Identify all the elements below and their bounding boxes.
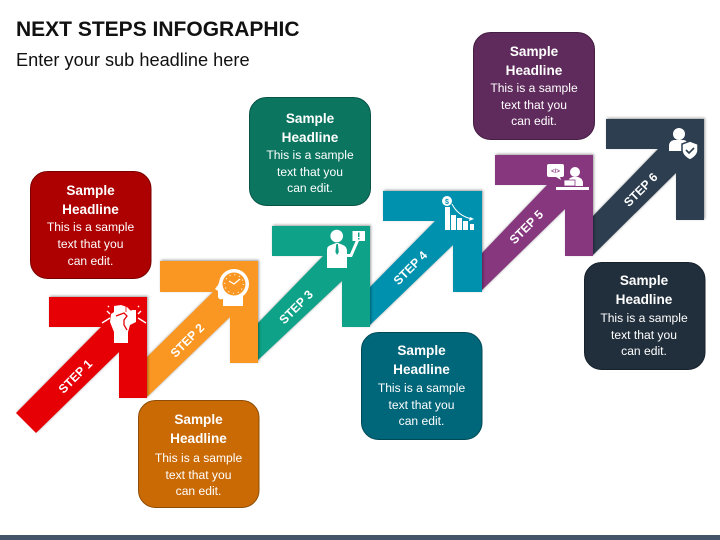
callout: step 4: text that you xyxy=(389,398,454,412)
callout: step 4: This is a sample xyxy=(378,381,465,395)
callout: step 1 xyxy=(30,172,151,278)
footer bar xyxy=(0,535,720,540)
callout: step 4 xyxy=(362,332,482,440)
callout: step 3: Headline xyxy=(282,130,339,145)
callout: step 1: text that you xyxy=(58,237,123,251)
callout: step 6 xyxy=(584,262,705,370)
callout: step 2: Sample xyxy=(174,412,223,427)
callout: step 5: can edit. xyxy=(511,114,557,128)
callout: step 3: can edit. xyxy=(287,181,333,195)
callout: step 5: Headline xyxy=(506,63,563,78)
arrow: step 2 xyxy=(147,261,258,397)
arrow: step 6: STEP 6 xyxy=(621,170,661,209)
callout: step 2 xyxy=(138,400,259,508)
callout: step 3: text that you xyxy=(277,165,343,179)
callout: step 5: Sample xyxy=(510,44,559,59)
icon: person with shield xyxy=(669,128,698,160)
icon: raised fist xyxy=(102,305,146,343)
callout: step 5: text that you xyxy=(501,98,567,112)
callout: step 6: This is a sample xyxy=(600,311,688,325)
callout: step 6: text that you xyxy=(611,328,677,342)
callout: step 6: Sample xyxy=(620,273,669,288)
callout: step 6: can edit. xyxy=(621,344,667,358)
arrow: step 3 xyxy=(258,226,370,360)
arrow: step 6 xyxy=(593,119,704,255)
arrow: step 5: STEP 5 xyxy=(507,207,546,247)
icon: developer at desk: </> xyxy=(551,169,560,175)
icon: businessman holding sign xyxy=(327,230,365,268)
icon: falling bar chart: $ xyxy=(445,199,449,206)
callout: step 2: This is a sample xyxy=(155,451,242,465)
callout: step 4: Headline xyxy=(393,362,450,377)
callout: step 5: This is a sample xyxy=(490,81,578,95)
callout: step 3 xyxy=(250,98,370,206)
callout: step 1: This is a sample xyxy=(47,220,134,234)
arrow: step 2: STEP 2 xyxy=(168,321,207,360)
callout: step 6: Headline xyxy=(616,292,673,307)
callout: step 1: Sample xyxy=(66,183,115,198)
callout: step 3: Sample xyxy=(286,111,335,126)
callout: step 1: Headline xyxy=(62,202,119,217)
arrow: step 5 xyxy=(482,155,593,290)
callout: step 4: can edit. xyxy=(399,414,444,428)
callout: step 2: Headline xyxy=(170,431,227,446)
arrow: step 3: STEP 3 xyxy=(276,287,316,327)
subtitle: Enter your sub headline here xyxy=(16,50,250,70)
arrow: step 4: STEP 4 xyxy=(391,248,430,288)
arrow: step 1: STEP 1 xyxy=(56,357,95,396)
icon: head with clock xyxy=(215,269,249,306)
title: NEXT STEPS INFOGRAPHIC xyxy=(16,18,300,41)
callout: step 4: Sample xyxy=(397,343,446,358)
callout: step 2: text that you xyxy=(166,468,231,482)
callout: step 2: can edit. xyxy=(176,484,221,498)
callout: step 1: can edit. xyxy=(68,254,113,268)
callout: step 5 xyxy=(474,32,594,140)
arrow: step 1 xyxy=(16,297,147,433)
callout: step 3: This is a sample xyxy=(266,148,354,162)
arrow: step 4 xyxy=(370,191,482,325)
